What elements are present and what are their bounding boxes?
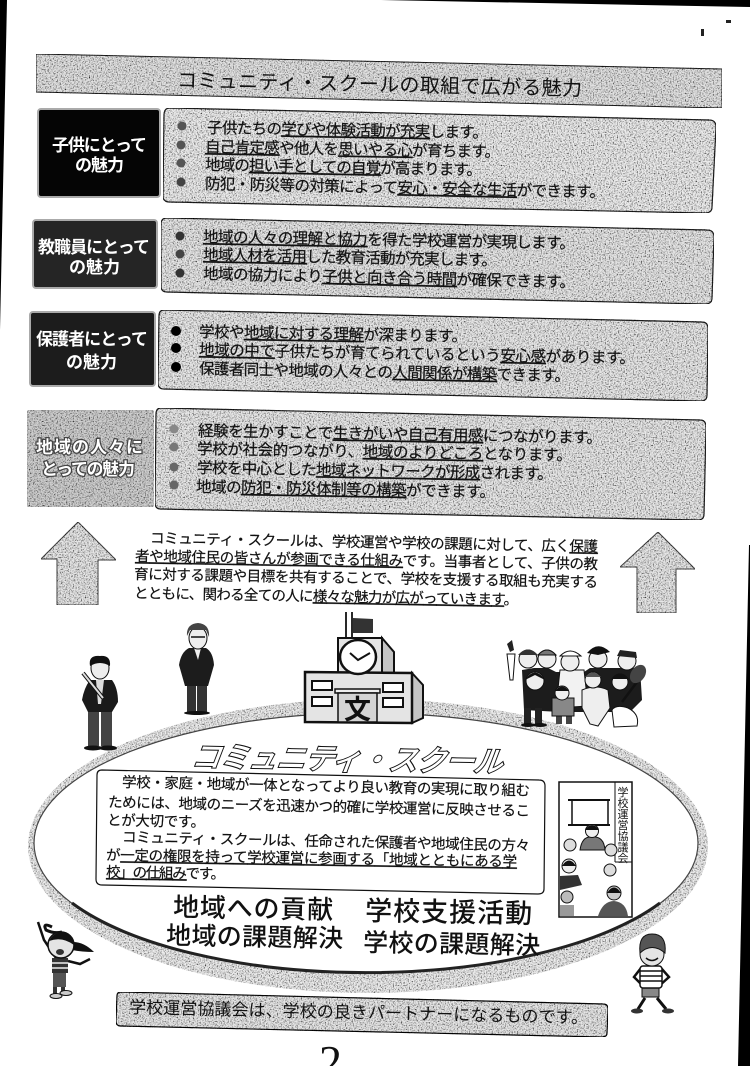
icon: boy with hands on hips: [631, 934, 674, 1014]
panel: children: [38, 108, 716, 213]
panel: teachers: [33, 218, 714, 304]
text box: description: 学校・家庭・地域が一体となってより良い教育の実現に取り組む: [122, 774, 530, 800]
content box: community: 学校を中心とした地域ネットワークが形成されます。: [197, 459, 553, 483]
label: teachers: 教職員にとって: [38, 238, 150, 257]
content box: children: 防犯・防災等の対策によって安心・安全な生活ができます。: [205, 175, 605, 201]
icon: school building: [305, 612, 423, 725]
label: community: 地域の人々に: [36, 438, 143, 457]
content box: community: 地域の防犯・防災体制等の構築ができます。: [196, 478, 495, 501]
label: parents: の魅力: [66, 352, 117, 372]
panel: community: [27, 408, 706, 520]
keyword: school support activities: 学校支援活動: [365, 896, 532, 929]
content box: children: 地域の担い手としての自覚が高まります。: [205, 156, 482, 179]
panel: parents: [30, 310, 708, 401]
content box: teachers: 地域人材を活用した教育活動が充実します。: [203, 246, 497, 270]
content box: teachers: [161, 218, 714, 304]
label: teachers: の魅力: [69, 257, 120, 277]
label: parents: [30, 312, 155, 386]
keyword: solving community issues: 地域の課題解決: [166, 922, 343, 953]
icon: man with glasses: [179, 623, 214, 715]
banner: school partner message: [116, 992, 608, 1037]
label: teachers: [33, 220, 157, 288]
icon: school building: 文: [344, 695, 371, 725]
icon: community group: [507, 640, 649, 727]
banner: school partner message: 学校運営協議会は、学校の良きパートナーになるものです。: [129, 998, 588, 1027]
community school heading: コミュニティ・スクール: [187, 740, 512, 779]
vertical label: 運: [618, 808, 628, 821]
vertical label: 会: [618, 852, 628, 865]
content box: parents: 地域の中で子供たちが育てられているという安心感があります。: [199, 341, 635, 367]
content box: teachers: 地域の人々の理解と協力を得た学校運営が実現します。: [203, 228, 575, 252]
content box: community: 学校が社会的つながり、地域のよりどころとなります。: [197, 440, 572, 465]
content box: children: 自己肯定感や他人を思いやる心が育ちます。: [205, 138, 500, 161]
label: parents: 保護者にとって: [36, 330, 148, 349]
content box: parents: [158, 310, 708, 401]
vertical label: 学: [618, 785, 628, 799]
intro paragraph: 育に対する課題や目標を共有することで、学校を支援する取組も充実する: [134, 566, 598, 591]
keyword: contribution to the community: 地域への貢献: [173, 892, 333, 925]
keyword: solving school issues: 学校の課題解決: [363, 929, 540, 960]
label: children: 子供にとって: [52, 136, 147, 155]
illustration: school council meeting: [559, 782, 632, 917]
vertical label: 校: [618, 796, 628, 810]
intro paragraph: 者や地域住民の皆さんが参画できる仕組みです。当事者として、子供の教: [135, 548, 599, 573]
content box: community: [155, 408, 706, 520]
intro paragraph: コミュニティ・スクールは、学校運営や学校の課題に対して、広く保護: [150, 530, 599, 556]
icon: girl pointing: [38, 922, 94, 998]
content box: parents: 保護者同士や地域の人々との人間関係が構築できます。: [199, 360, 570, 385]
icon: man with baton: [82, 656, 118, 750]
label: community: [27, 410, 154, 507]
vertical label: 協: [618, 830, 628, 843]
content box: community: 経験を生かすことで生きがいや自己有用感につながります。: [198, 422, 602, 447]
content box: children: [163, 108, 716, 213]
title banner: [36, 54, 722, 108]
vertical label: 議: [618, 840, 628, 854]
text box: description: 校」の仕組みです。: [106, 864, 225, 883]
content box: teachers: 地域の協力により子供と向き合う時間が確保できます。: [203, 265, 575, 291]
label: community: とっての魅力: [41, 459, 135, 479]
arrow: left up: [41, 522, 116, 605]
label: children: の魅力: [75, 155, 124, 175]
vertical label: 営: [618, 818, 628, 832]
arrow: right up: [620, 532, 695, 613]
label: children: [38, 109, 160, 197]
title text: コミュニティ・スクールの取組で広がる魅力: [177, 69, 582, 100]
intro paragraph: とともに、関わる全ての人に様々な魅力が広がっていきます。: [134, 585, 518, 609]
text box: description: ためには、地域のニーズを迅速かつ的確に学校運営に反映させるこ: [108, 794, 530, 820]
text box: description: が一定の権限を持って学校運営に参画する「地域とともにある学: [106, 847, 517, 870]
content box: children: 子供たちの学びや体験活動が充実します。: [207, 119, 488, 142]
intro paragraph: [134, 530, 599, 609]
content box: parents: 学校や地域に対する理解が深まります。: [199, 323, 467, 346]
text box: description: コミュニティ・スクールは、任命された保護者や地域住民の方々: [122, 829, 530, 855]
text box: description: [96, 770, 545, 894]
community school ring: [28, 699, 708, 993]
text box: description: とが大切です。: [107, 812, 205, 831]
